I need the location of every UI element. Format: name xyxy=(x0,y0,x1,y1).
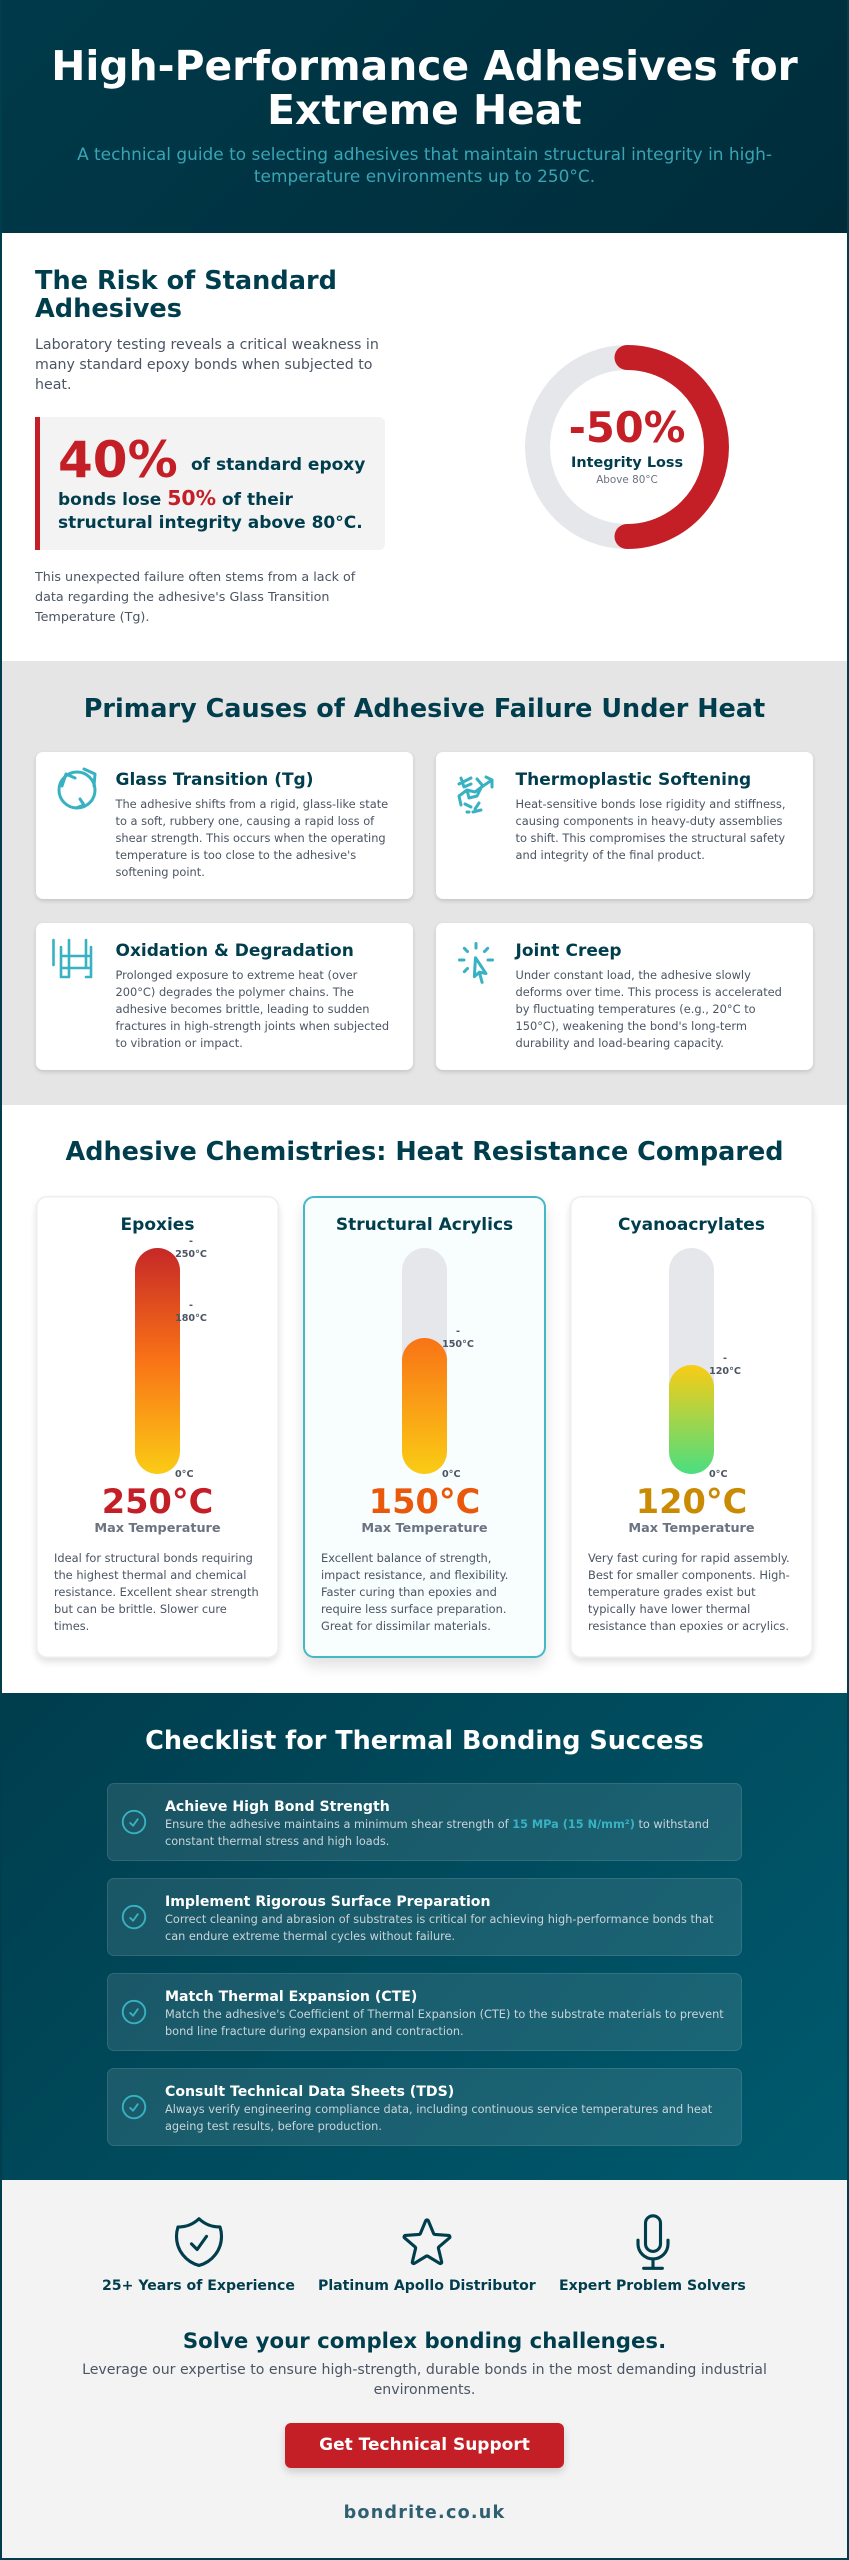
description: but can be brittle. Slower cure xyxy=(54,1602,227,1616)
call to action text xyxy=(82,2362,767,2398)
call to action heading: Solve your complex bonding challenges. xyxy=(183,2329,666,2354)
description: times. xyxy=(54,1618,89,1632)
thermometer fill xyxy=(135,1248,180,1474)
intro text: Laboratory testing reveals a critical weakness in xyxy=(35,337,379,353)
description xyxy=(54,1550,259,1632)
card: cyanoacrylates xyxy=(570,1196,813,1658)
max temperature caption: Max Temperature xyxy=(361,1521,488,1536)
description: resistance than epoxies or acrylics. xyxy=(588,1618,789,1632)
subtitle: A technical guide to selecting adhesives that maintain structural integrity in high- xyxy=(77,144,772,164)
label 150: 150°C xyxy=(442,1338,474,1350)
max temperature value: 250°C xyxy=(102,1482,213,1521)
item text xyxy=(165,2007,724,2038)
checklist item: data sheets xyxy=(107,2068,742,2146)
section heading: Checklist for Thermal Bonding Success xyxy=(145,1726,704,1756)
call to action text: Leverage our expertise to ensure high-strength, durable bonds in the most demanding industrial xyxy=(82,2362,767,2378)
follow-up text: Temperature (Tg). xyxy=(35,609,149,624)
description xyxy=(588,1550,790,1632)
panel: footer background xyxy=(0,2180,849,2560)
intro text: many standard epoxy bonds when subjected to xyxy=(35,357,372,373)
heading: Adhesives xyxy=(35,294,182,324)
card: joint creep xyxy=(436,923,813,1070)
thermometer xyxy=(402,1248,447,1474)
description: require less surface preparation. xyxy=(321,1602,506,1616)
card title: Oxidation & Degradation xyxy=(116,940,354,960)
callout text: of standard epoxy xyxy=(191,455,365,475)
card text: to shift. This compromises the structural safety xyxy=(516,831,785,845)
header banner xyxy=(0,0,849,233)
label 0: 0°C xyxy=(709,1468,728,1480)
heading xyxy=(35,266,337,324)
card text: temperature is too close to the adhesive's xyxy=(116,848,356,862)
card text: causing components in heavy-duty assemblies xyxy=(516,814,782,828)
description: Best for smaller components. High- xyxy=(588,1568,790,1582)
icon: shield xyxy=(174,2217,224,2267)
card text xyxy=(516,797,785,862)
card: oxidation and degradation xyxy=(36,923,413,1070)
label 250 xyxy=(175,1236,207,1260)
label 0: 0°C xyxy=(175,1468,194,1480)
button: Get Technical Support xyxy=(319,2435,530,2455)
card title: Joint Creep xyxy=(516,940,622,960)
subtitle: temperature environments up to 250°C. xyxy=(254,166,595,186)
callout: 40 percent statistic xyxy=(35,417,385,550)
donut value: -50% xyxy=(569,403,685,452)
item text: bond line fracture during expansion and contraction. xyxy=(165,2024,464,2038)
card text: shear strength. This occurs when the operating xyxy=(116,831,386,845)
heading: The Risk of Standard xyxy=(35,266,337,296)
thermometer xyxy=(135,1248,180,1474)
trust label: problem solvers: Expert Problem Solvers xyxy=(559,2278,746,2294)
icon: star xyxy=(402,2218,452,2266)
title: High-Performance Adhesives for xyxy=(51,42,798,90)
card text: and integrity of the final product. xyxy=(516,848,705,862)
description: impact resistance, and flexibility. xyxy=(321,1568,508,1582)
description: Ideal for structural bonds requiring xyxy=(54,1550,253,1564)
description: typically have lower thermal xyxy=(588,1602,750,1616)
card text: Heat-sensitive bonds lose rigidity and stiffness, xyxy=(516,797,785,811)
section heading: Primary Causes of Adhesive Failure Under Heat xyxy=(84,694,765,724)
intro text xyxy=(35,337,379,393)
description: temperature grades exist but xyxy=(588,1584,756,1598)
intro text: heat. xyxy=(35,377,72,393)
label 120 xyxy=(709,1352,741,1376)
item text xyxy=(165,2102,712,2133)
label 250: - xyxy=(189,1236,193,1246)
card text: deforms over time. This process is accelerated xyxy=(516,985,782,999)
icon: check circle xyxy=(122,1904,146,1930)
card text: fractures in high-strength joints when subjected xyxy=(116,1019,389,1033)
checklist item: thermal expansion xyxy=(107,1973,742,2051)
card text: The adhesive shifts from a rigid, glass-like state xyxy=(116,797,388,811)
donut label: Integrity Loss xyxy=(571,455,683,471)
description: Great for dissimilar materials. xyxy=(321,1618,491,1632)
item title: Match Thermal Expansion (CTE) xyxy=(165,1989,417,2005)
card: glass transition xyxy=(36,752,413,899)
item text xyxy=(165,1817,709,1848)
card text: Under constant load, the adhesive slowly xyxy=(516,968,751,982)
icon: check circle xyxy=(122,2000,146,2024)
icon: softening arrows xyxy=(457,775,494,814)
icon: degradation lattice xyxy=(52,938,92,978)
description: Faster curing than epoxies and xyxy=(321,1584,497,1598)
panel: risk of standard adhesives xyxy=(0,233,849,661)
trust label: experience: 25+ Years of Experience xyxy=(102,2278,295,2294)
callout text: bonds lose 50% of their xyxy=(58,486,293,510)
card text: durability and load-bearing capacity. xyxy=(516,1036,724,1050)
label 120: 120°C xyxy=(709,1366,741,1376)
label 120: - xyxy=(723,1352,727,1364)
label 150 xyxy=(442,1326,474,1350)
description xyxy=(321,1550,508,1632)
checklist item: bond strength xyxy=(107,1783,742,1861)
card: epoxies xyxy=(36,1196,279,1658)
card text: adhesive becomes brittle, leading to sudden xyxy=(116,1002,369,1016)
card title: Thermoplastic Softening xyxy=(516,770,751,790)
card: thermoplastic softening xyxy=(436,752,813,899)
description: Excellent balance of strength, xyxy=(321,1550,491,1564)
description: Very fast curing for rapid assembly. xyxy=(588,1550,790,1564)
thermometer fill xyxy=(402,1338,447,1474)
card text: Prolonged exposure to extreme heat (over xyxy=(116,968,357,982)
donut sublabel: Above 80°C xyxy=(596,474,658,486)
card title: Cyanoacrylates xyxy=(618,1214,765,1234)
item text: can endure extreme thermal cycles without failure. xyxy=(165,1929,455,1943)
card text xyxy=(516,968,782,1050)
trust label: distributor: Platinum Apollo Distributor xyxy=(318,2278,536,2294)
card text: to a soft, rubbery one, causing a rapid loss of xyxy=(116,814,374,828)
callout text: 40% xyxy=(58,431,178,489)
follow-up text xyxy=(34,569,356,624)
follow-up text: This unexpected failure often stems from a lack of xyxy=(35,569,355,584)
label 0: 0°C xyxy=(442,1468,461,1480)
callout text xyxy=(58,431,365,533)
label 180 xyxy=(175,1300,207,1324)
button xyxy=(285,2423,564,2468)
panel: checklist background xyxy=(0,1693,849,2180)
item title: Consult Technical Data Sheets (TDS) xyxy=(165,2084,454,2100)
icon: cursor rays xyxy=(458,942,494,984)
card text: to vibration or impact. xyxy=(116,1036,243,1050)
thermometer fill xyxy=(669,1365,714,1474)
card text xyxy=(115,797,388,879)
label 150: - xyxy=(456,1326,460,1336)
max temperature value: 150°C xyxy=(369,1482,480,1521)
item text: Ensure the adhesive maintains a minimum shear strength of 15 MPa (15 N/mm²) to withstand xyxy=(165,1817,709,1831)
description: the highest thermal and chemical xyxy=(54,1568,246,1582)
label 180: 180°C xyxy=(175,1312,207,1324)
max temperature value: 120°C xyxy=(636,1482,747,1521)
item text xyxy=(165,1912,714,1943)
icon: check circle xyxy=(122,2094,146,2120)
icon: check circle xyxy=(122,1810,146,1834)
section heading: chemistries: Adhesive Chemistries: Heat Resistance Compared xyxy=(65,1137,784,1167)
checklist item: surface preparation xyxy=(107,1878,742,1956)
card text xyxy=(116,968,389,1050)
card title: Glass Transition (Tg) xyxy=(116,770,314,790)
label 250: 250°C xyxy=(175,1248,207,1260)
card title: Structural Acrylics xyxy=(336,1214,513,1234)
call to action text: environments. xyxy=(374,2382,475,2398)
title xyxy=(51,42,798,134)
item text: Always verify engineering compliance data, including continuous service temperatures and heat xyxy=(165,2102,712,2116)
icon: cycle arrows xyxy=(58,768,96,810)
max temperature caption: Max Temperature xyxy=(628,1521,755,1536)
subtitle xyxy=(77,144,772,186)
max temperature caption: Max Temperature xyxy=(94,1521,221,1536)
item text: Correct cleaning and abrasion of substrates is critical for achieving high-performance bonds that xyxy=(165,1912,713,1926)
donut chart: integrity loss xyxy=(525,345,729,549)
card text: softening point. xyxy=(116,865,205,879)
thermometer xyxy=(669,1248,714,1474)
card text: 200°C) degrades the polymer chains. The xyxy=(116,985,354,999)
description: resistance. Excellent shear strength xyxy=(54,1584,259,1598)
card text: by fluctuating temperatures (e.g., 20°C to xyxy=(516,1002,756,1016)
card text: 150°C), weakening the bond's long-term xyxy=(516,1019,747,1033)
item title: Implement Rigorous Surface Preparation xyxy=(165,1894,491,1910)
item text: constant thermal stress and high loads. xyxy=(165,1834,389,1848)
website: bondrite.co.uk xyxy=(344,2503,505,2523)
icon: microphone xyxy=(636,2214,670,2270)
card: structural acrylics xyxy=(303,1196,546,1658)
item title: Achieve High Bond Strength xyxy=(165,1799,390,1815)
label 180: - xyxy=(189,1300,193,1310)
callout text: structural integrity above 80°C. xyxy=(58,513,363,533)
panel: causes of failure xyxy=(0,661,849,1105)
follow-up text: data regarding the adhesive's Glass Transition xyxy=(35,589,329,604)
item text: ageing test results, before production. xyxy=(165,2119,382,2133)
title: Extreme Heat xyxy=(267,86,582,134)
card title: Epoxies xyxy=(121,1214,194,1234)
item text: Match the adhesive's Coefficient of Thermal Expansion (CTE) to the substrate materials to prevent xyxy=(165,2007,724,2021)
